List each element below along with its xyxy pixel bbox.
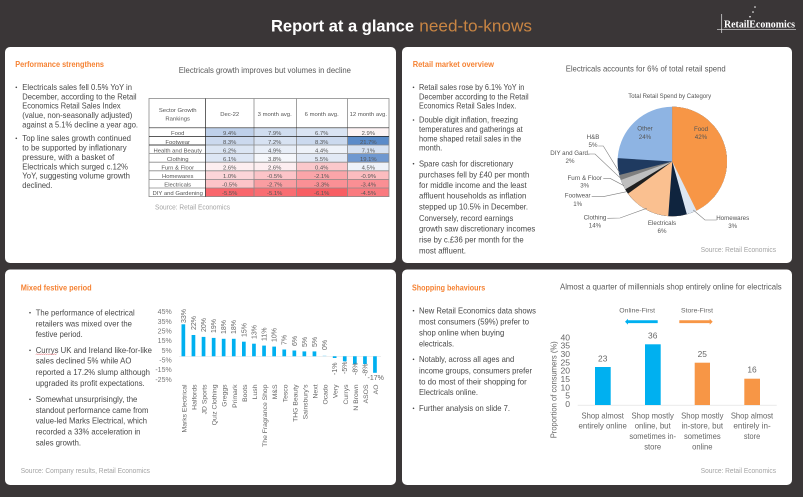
table: sector growth rankings: 3 month avg. (258, 112, 292, 118)
table: sector growth rankings: 4.4% (315, 148, 329, 154)
bar chart: retailer sales growth: 5% (162, 348, 172, 355)
bar chart: retailer sales growth: 11% (262, 328, 268, 341)
bar chart: retailer sales growth: -25% (155, 377, 172, 384)
title (271, 16, 532, 36)
table: sector growth rankings: 6.7% (315, 131, 329, 137)
text block: market bullets: affluent households as inflation (419, 192, 526, 201)
table: sector growth rankings: DIY and Gardening (153, 191, 203, 197)
table: sector growth rankings: Footwear (165, 140, 190, 146)
text block: shopping bullets: Further analysis on slide 7. (419, 404, 510, 413)
text block: market bullets: growth saw discretionary incomes (419, 225, 535, 234)
bar chart: proportion of consumers: 0 (565, 399, 570, 409)
table: sector growth rankings: 6 month avg. (305, 112, 339, 118)
text block: performance bullets: declined. (22, 181, 52, 190)
bar chart: proportion of consumers: online, but (635, 420, 671, 430)
bar chart: retailer sales growth: THG Beauty (292, 384, 299, 422)
pie chart: total retail spend by category: DIY and Gard. (550, 150, 590, 157)
pie chart: total retail spend by category: 6% (658, 228, 667, 235)
pie chart: total retail spend by category: Furn & Floor (568, 175, 602, 182)
text block: performance bullets: Top line sales growth continued (22, 134, 131, 143)
label and arrow: store-first (679, 308, 713, 325)
text block: festive bullets (29, 308, 152, 448)
bar chart: retailer sales growth: -1% (332, 363, 339, 375)
table: sector growth rankings: Dec-22 (220, 112, 239, 118)
bar chart: retailer sales growth: Marks Electrical (181, 384, 188, 432)
bar chart: proportion of consumers: 36 (648, 330, 658, 340)
bar chart: proportion of consumers: online (692, 441, 713, 451)
bar chart: proportion of consumers: 10 (560, 382, 570, 392)
table: sector growth rankings: Health and Beauty (153, 148, 202, 154)
table: sector growth rankings: 2.6% (223, 165, 237, 171)
bar chart: retailer sales growth: 19% (211, 319, 218, 333)
text block: festive bullets: The performance of electrical (36, 308, 135, 317)
bar chart: retailer sales growth: 15% (158, 338, 172, 345)
bar chart: retailer sales growth (155, 309, 384, 447)
pie chart: total retail spend by category (550, 93, 749, 235)
text block: shopping bullets: Notably, across all ages and (419, 355, 514, 364)
bar chart: retailer sales growth: 33% (181, 309, 188, 323)
text block: performance bullets: to be supported by inflationary (22, 143, 128, 152)
pie chart: total retail spend by category: Total Retail Spend by Category (628, 93, 712, 100)
bar chart: proportion of consumers (548, 330, 777, 451)
table: sector growth rankings: 3.8% (268, 157, 282, 163)
table: sector growth rankings: Rankings (165, 117, 190, 123)
text block: festive bullets: reported a 17.2% slump although (36, 368, 150, 377)
pie chart: total retail spend by category: 24% (639, 134, 652, 141)
bar chart: proportion of consumers: sometimes (684, 431, 721, 441)
bar chart: retailer sales growth: -5% (342, 362, 349, 374)
pie chart: total retail spend by category: 3% (580, 182, 590, 189)
bar chart: retailer sales growth: 7% (282, 335, 289, 345)
pie chart: total retail spend by category: H&B (587, 134, 599, 141)
bar chart: retailer sales growth: JD Sports (202, 384, 209, 414)
bar chart: retailer sales growth: -8% (362, 364, 369, 376)
table: sector growth rankings: 6.2% (223, 148, 237, 154)
heading: shopping behaviours: Shopping behaviours (412, 282, 485, 292)
table: sector growth rankings: 12 month avg. (350, 112, 387, 118)
pie chart: total retail spend by category: Footwear (565, 192, 591, 199)
text block: shopping bullets (413, 306, 536, 413)
label and arrow: store-first: Store-First (681, 308, 713, 315)
table: sector growth rankings: Food (171, 131, 184, 137)
text block: market bullets: December according to the Retail (419, 92, 529, 101)
table: sector growth rankings: 7.9% (268, 131, 282, 137)
table: sector growth rankings: 4.5% (362, 165, 376, 171)
panel: retail market overview (402, 47, 792, 263)
text block: market bullets: month. (419, 144, 442, 153)
text block: market bullets: stepped up 10.5% in December. (419, 203, 528, 212)
bar chart: retailer sales growth: M&S (272, 384, 279, 399)
table: sector growth rankings: Homewares (162, 174, 193, 180)
bar chart: retailer sales growth: -15% (155, 367, 172, 374)
pie chart: total retail spend by category: Clothing (584, 214, 607, 221)
bar chart: proportion of consumers: 25 (698, 349, 707, 359)
bar chart: retailer sales growth: 15% (241, 323, 248, 337)
bar chart: retailer sales growth: 13% (251, 325, 258, 339)
panel: shopping behaviours (402, 270, 792, 485)
bar chart: proportion of consumers: 40 (560, 332, 570, 342)
title: Report at a glance (271, 16, 414, 36)
bar chart: retailer sales growth: 18% (221, 320, 228, 334)
bar chart: retailer sales growth: -8% (352, 363, 359, 375)
bar chart: proportion of consumers: 25 (560, 357, 570, 367)
bar chart: retailer sales growth: 0% (322, 340, 329, 350)
bar chart: proportion of consumers: 16 (747, 365, 757, 375)
source: pie chart: Source: Retail Economics (701, 245, 776, 254)
bar chart: proportion of consumers: Shop almost (731, 410, 774, 420)
text block: festive bullets: recorded a 33% acceleration in (36, 428, 140, 437)
bar chart: retailer sales growth: Primark (232, 384, 239, 408)
bar chart: retailer sales growth: Halfords (192, 384, 198, 410)
text block: festive bullets: Somewhat unsurprisingly, the (36, 395, 138, 404)
table: sector growth rankings: -5.5% (222, 191, 238, 197)
text block: market bullets: temperatures and gatherings at (419, 125, 523, 134)
bar chart: retailer sales growth: 6% (292, 336, 299, 346)
heading: mixed festive period: Mixed festive period (21, 282, 92, 292)
bar chart: retailer sales growth: The Fragrance Shop (262, 384, 269, 447)
bar chart: retailer sales growth: Next (312, 384, 320, 398)
table: sector growth rankings: 2.6% (268, 165, 282, 171)
text block: performance bullets: Electricals sales fell 0.5% YoY in (22, 83, 132, 92)
bar chart: retailer sales growth: Very (333, 384, 340, 398)
text block: market bullets: Double digit inflation, freezing (419, 116, 518, 125)
table: sector growth rankings: 7.2% (268, 140, 282, 146)
bar chart: proportion of consumers: 23 (598, 353, 608, 363)
bar chart: proportion of consumers: store (744, 431, 760, 441)
pie chart: total retail spend by category: Electricals (648, 220, 676, 227)
bar chart: proportion of consumers: entirely in- (733, 420, 771, 430)
text block: market bullets: Economics Retail Sales Index. (419, 102, 516, 111)
text block: festive bullets: festive period. (36, 330, 83, 339)
bar chart: proportion of consumers: 15 (560, 374, 570, 384)
text block: shopping bullets: New Retail Economics data shows (419, 306, 536, 315)
table: sector growth rankings: 5.5% (315, 157, 329, 163)
table: sector growth rankings: -3.4% (361, 182, 377, 188)
table: sector growth rankings: -0.5% (222, 182, 238, 188)
bar chart: retailer sales growth: Tesco (282, 384, 289, 402)
bar chart: retailer sales growth: Ocado (323, 384, 330, 405)
bar chart: retailer sales growth: N Brown (353, 384, 360, 411)
text block: market bullets: Retail sales rose by 6.1% YoY in (419, 83, 524, 92)
table: sector growth rankings: Clothing (167, 157, 189, 163)
pie chart: total retail spend by category: Homewares (716, 215, 749, 222)
text block: market bullets: for middle income and the least (419, 181, 527, 190)
bar chart: proportion of consumers: entirely online (579, 420, 627, 430)
table: sector growth rankings: Furn & Floor (161, 165, 194, 171)
bar chart: retailer sales growth: ASOS (363, 384, 370, 403)
pie chart: total retail spend by category: 14% (589, 222, 602, 229)
table: sector growth rankings: 1.0% (223, 174, 237, 180)
table: sector growth rankings: -0.5% (267, 174, 283, 180)
text block: festive bullets: sales declined 5% while AO (36, 357, 131, 366)
pie chart: total retail spend by category: 42% (695, 134, 708, 141)
table: sector growth rankings: -2.1% (314, 174, 330, 180)
bar chart: retailer sales growth: 35% (158, 319, 172, 326)
chart title: electricals growth: Electricals growth improves but volumes in decline (179, 65, 351, 75)
source: company results: Source: Company results, Retail Economics (21, 466, 150, 475)
table: sector growth rankings: -3.3% (314, 182, 330, 188)
text block: festive bullets: Currys UK and Ireland like-for-like (36, 346, 152, 355)
bar chart: retailer sales growth: -17% (368, 375, 384, 382)
table: sector growth rankings: 8.3% (315, 140, 329, 146)
bar chart: retailer sales growth: Boots (242, 384, 249, 402)
text block: festive bullets: upgraded its profit expectations. (36, 379, 145, 388)
text block: shopping bullets: shop online when buying (419, 328, 504, 337)
bar chart: proportion of consumers: 20 (560, 366, 570, 376)
bar chart: retailer sales growth: Sainsbury's (302, 384, 309, 419)
pie chart: total retail spend by category: 5% (589, 142, 598, 149)
panel: mixed festive period (5, 270, 396, 485)
text block: performance bullets: YoY, suggesting volume growth (22, 172, 130, 181)
bar chart: retailer sales growth: 45% (158, 309, 172, 316)
text block: market bullets (413, 83, 535, 256)
table: sector growth rankings: Sector Growth (159, 108, 197, 114)
bar chart: retailer sales growth: Currys (343, 384, 350, 405)
text block: market bullets: home shaped retail sales in the (419, 134, 522, 143)
table: sector growth rankings: 4.9% (268, 148, 282, 154)
bar chart: proportion of consumers: sometimes in- (629, 431, 676, 441)
bar chart: proportion of consumers: 35 (560, 341, 570, 351)
bar chart: proportion of consumers: Shop mostly (681, 410, 724, 420)
table: sector growth rankings: 7.1% (362, 148, 376, 154)
text block: performance bullets: (value, non-seasonally adjusted) (22, 111, 133, 120)
text block: performance bullets: December, according to the Retail (22, 92, 137, 101)
text block: festive bullets: sales growth. (36, 439, 81, 448)
table: sector growth rankings: -4.5% (361, 191, 377, 197)
bar chart: retailer sales growth: AO (373, 384, 380, 394)
title: need-to-knows (419, 16, 532, 36)
text block: festive bullets: value-led Marks Electrical, which (36, 417, 147, 426)
bar chart: retailer sales growth: 20% (201, 318, 208, 332)
bar chart: retailer sales growth: Greggs (222, 384, 229, 407)
text block: performance bullets: Electricals which surged c.12% (22, 162, 128, 171)
bar chart: retailer sales growth: 5% (302, 337, 309, 347)
table: sector growth rankings: 0.4% (315, 165, 329, 171)
table: sector growth rankings: 21.7% (360, 140, 377, 146)
logo: Retail Economics: RetailEconomics (724, 19, 795, 30)
table: sector growth rankings: 6.1% (223, 157, 237, 163)
bar chart: retailer sales growth: 5% (312, 337, 319, 347)
bar chart: retailer sales growth: 25% (158, 328, 172, 336)
pie chart: total retail spend by category: 2% (566, 158, 575, 165)
text block: performance bullets (15, 83, 138, 190)
text block: performance bullets: Economics Retail Sales Index (22, 102, 121, 111)
bar chart: retailer sales growth: 22% (191, 316, 198, 330)
table: sector growth rankings (149, 98, 389, 197)
bar chart: proportion of consumers: Shop mostly (632, 410, 675, 420)
table: sector growth rankings: 9.4% (223, 131, 237, 137)
table: sector growth rankings: -2.7% (267, 182, 283, 188)
table: sector growth rankings: 2.9% (362, 131, 376, 137)
source: table: Source: Retail Economics (155, 202, 230, 212)
text block: shopping bullets: income groups, consumers prefer (419, 366, 532, 375)
heading: performance strengths: Performance strengthens (15, 59, 104, 69)
text block: market bullets: Spare cash for discretionary (419, 159, 514, 168)
table: sector growth rankings: -6.1% (314, 191, 330, 197)
table: sector growth rankings: -0.9% (361, 174, 377, 180)
text block: market bullets: rise by c.£36 per month for the (419, 236, 524, 245)
pie chart: total retail spend by category: Other (637, 126, 653, 133)
text block: performance bullets: pressure, with a basket of (22, 153, 115, 162)
bar chart: proportion of consumers: store (644, 441, 662, 451)
bar chart: retailer sales growth: Quiz Clothing (212, 384, 219, 425)
text block: festive bullets: retailers was mixed over the (36, 319, 132, 328)
label and arrow: online-first: Online-First (619, 308, 655, 315)
text block: festive bullets: standout performance came from (36, 406, 149, 415)
text block: shopping bullets: electricals. (419, 339, 454, 348)
heading: retail market overview: Retail market overview (413, 59, 494, 69)
text block: market bullets: Conversely, record earnings (419, 214, 513, 223)
logo: Retail Economics (717, 6, 796, 33)
bar chart: proportion of consumers: Proportion of consumers (%) (548, 341, 558, 438)
bar chart: retailer sales growth: 10% (272, 328, 279, 342)
text block: market bullets: most affluent. (419, 247, 466, 256)
text block: shopping bullets: Electricals online. (419, 388, 478, 397)
text block: shopping bullets: most consumers (59%) prefer to (419, 317, 529, 326)
bar chart: retailer sales growth: -5% (159, 358, 172, 364)
bar chart: proportion of consumers: in-store, but (681, 420, 724, 430)
table: sector growth rankings: Electricals (164, 182, 191, 188)
text block: market bullets: purchases fell by £40 per month (419, 170, 529, 179)
pie chart: total retail spend by category: 3% (728, 223, 738, 230)
text block: performance bullets: against a 5.1% decline a year ago. (22, 120, 138, 129)
chart title: millennials: Almost a quarter of millennials shop entirely online for electricals (560, 282, 782, 292)
bar chart: retailer sales growth: 18% (231, 320, 238, 334)
bar chart: proportion of consumers: 5 (565, 391, 570, 401)
chart title: electricals share: Electricals accounts for 6% of total retail spend (566, 64, 726, 74)
bar chart: proportion of consumers: 30 (560, 349, 570, 359)
text block: shopping bullets: to do most of their shopping for (419, 377, 527, 386)
table: sector growth rankings: 8.3% (223, 140, 237, 146)
bar chart: proportion of consumers: Shop almost (582, 410, 624, 420)
label and arrow: online-first (619, 308, 658, 325)
table: sector growth rankings: -5.1% (267, 191, 283, 197)
table: sector growth rankings: 19.1% (360, 157, 377, 163)
pie chart: total retail spend by category: Food (694, 126, 709, 133)
bar chart: retailer sales growth: Lush (252, 384, 259, 399)
pie chart: total retail spend by category: 1% (573, 201, 583, 208)
source: shopping chart: Source: Retail Economics (701, 466, 776, 475)
panel: performance strengths (5, 47, 396, 263)
